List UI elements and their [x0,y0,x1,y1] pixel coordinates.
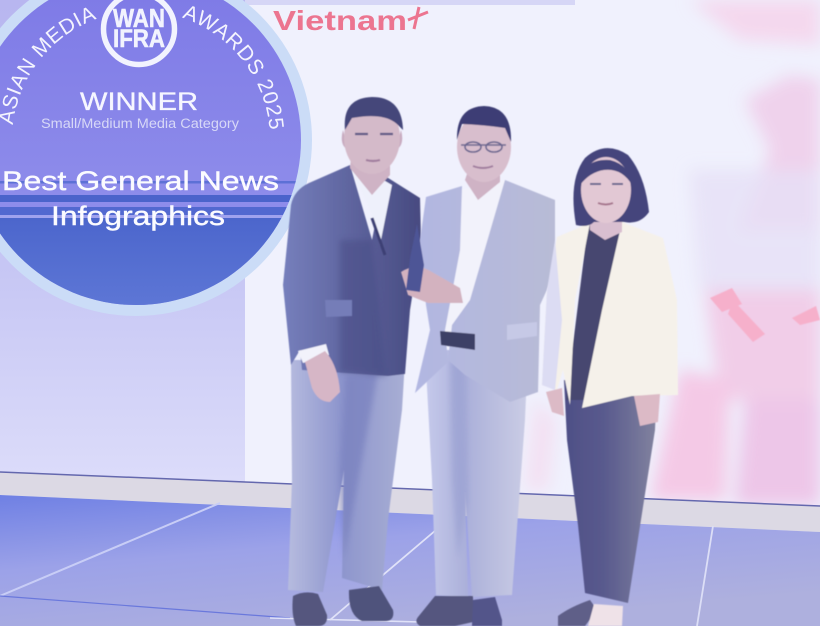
head [457,112,511,182]
face [581,157,631,223]
jacket [415,180,555,402]
left lavender panel [0,0,245,482]
face features [355,134,393,161]
award title: Infographics [51,201,225,231]
hand [305,351,340,402]
trophy [406,224,424,292]
badge dark lower band with stripes [0,181,310,310]
hands [401,267,463,303]
pocket [325,300,352,317]
neck [350,150,390,195]
logo: WAN-IFRA [104,0,174,64]
award title [2,166,279,231]
brand logo: Vietnam+ [273,5,428,36]
shirt [350,166,392,245]
person: woman in cream blazer [542,148,678,626]
blazer sleeve shading [542,240,562,390]
screen bottom edge [0,472,820,506]
foot [588,604,623,626]
shirt cuff [298,344,329,363]
LED screen background [240,0,820,510]
badge disc [0,0,301,305]
blazer [542,222,678,408]
trouser shadow [450,360,468,560]
shoes [292,592,327,626]
face features [590,184,623,204]
brand logo: Vietnam+: Vietnam [273,5,407,36]
hands [546,388,660,426]
plus mark [408,7,428,29]
stage floor [0,495,820,626]
shirt [440,180,505,335]
badge outer ring [0,0,312,316]
hair [457,106,511,142]
pink floral pattern on screen [525,0,820,505]
award badge [0,0,312,316]
shoes [558,600,597,626]
hair [345,97,403,130]
top strip of screen [245,0,575,5]
floor lines [0,503,713,626]
trousers [564,380,657,603]
bright blossoms on screen [710,288,820,342]
trousers [425,350,528,597]
trouser shadow [340,372,378,560]
neck [465,165,500,200]
award title: Best General News [2,166,279,196]
neck [590,205,622,240]
heading: winner: WINNER [80,88,198,116]
glasses and mouth [461,142,506,168]
jacket [283,165,421,376]
category label: Small/Medium Media Category [41,116,239,131]
ears [342,130,402,150]
arc text: Awards 2025: AWARDS 2025 [182,6,284,129]
person: left man in dark suit [283,97,421,626]
black top [566,225,628,400]
head [344,102,400,174]
logo: WAN-IFRA: IFRA [113,25,165,53]
hair [573,148,649,226]
logo: WAN-IFRA: WAN [113,3,165,33]
stage ledge [0,472,820,532]
jacket lower shading [340,240,386,376]
belt [440,331,475,350]
fringe [580,160,632,185]
trousers [288,360,405,592]
lanyard [372,218,385,255]
shoes [416,596,473,626]
pocket [507,322,537,340]
person: middle man in grey suit holding trophy [401,106,555,626]
